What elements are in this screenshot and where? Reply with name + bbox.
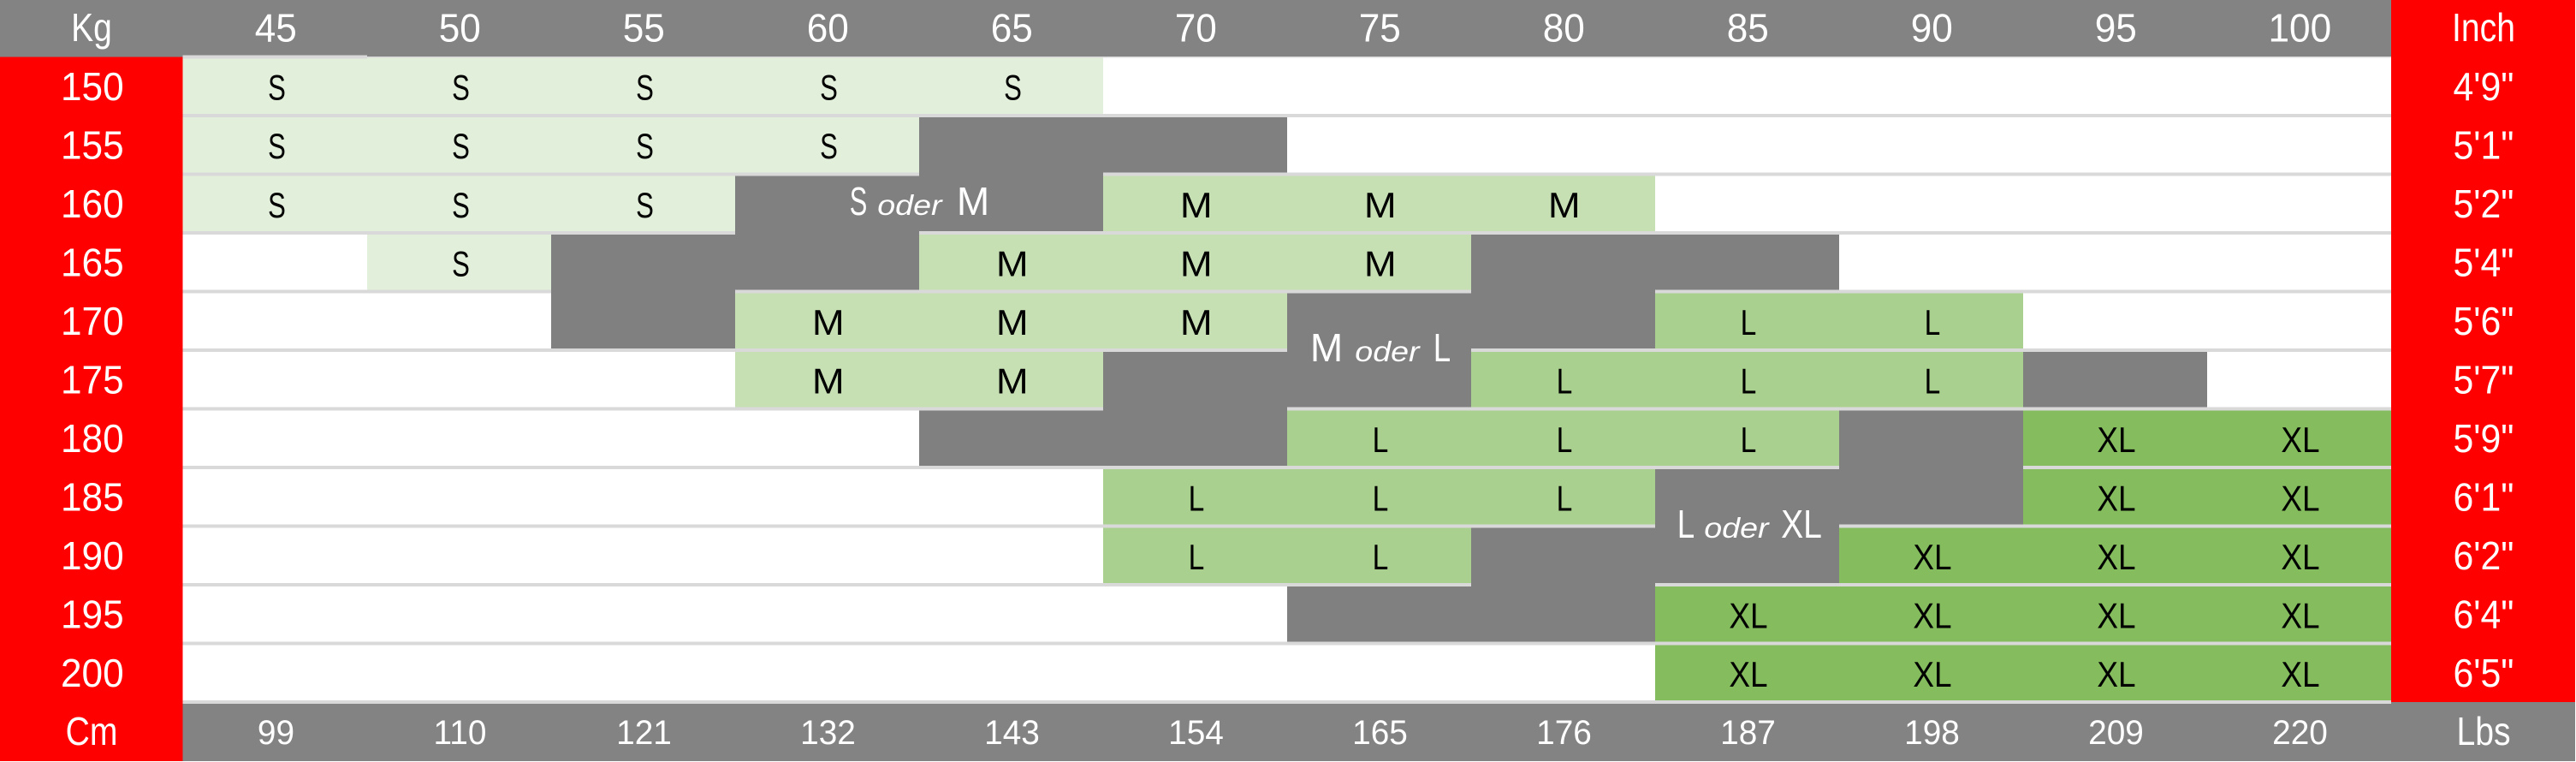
size L cells: L: [1741, 304, 1756, 343]
footer row: weight in lbs: 176: [1536, 713, 1592, 752]
size S cells: S: [636, 126, 654, 166]
height column in inches: [2391, 57, 2575, 702]
size L cells: L: [1925, 362, 1940, 402]
height column in inches: 6'5": [2454, 652, 2514, 695]
size S cells: S: [452, 126, 470, 166]
size XL cells: XL: [2281, 420, 2320, 461]
size XL cells: XL: [2281, 538, 2320, 578]
size XL cells: XL: [2097, 479, 2136, 519]
header row: weight in kg: Kg: [71, 6, 112, 51]
size XL cells: XL: [1913, 596, 1952, 636]
label: L oder XL: [1677, 502, 1822, 547]
size M cells: M: [996, 303, 1029, 343]
size S cells: S: [452, 244, 470, 284]
size M cells: M: [1364, 186, 1397, 226]
footer row: weight in lbs: 154: [1168, 713, 1224, 752]
footer row: weight in lbs: [183, 702, 2575, 761]
footer row: weight in lbs: 165: [1352, 713, 1408, 752]
size S cells: S: [268, 126, 286, 166]
size XL cells: XL: [2097, 596, 2136, 636]
size M cells: [735, 175, 1655, 409]
size L cells: L: [1189, 479, 1204, 519]
label: M oder L: oder: [1355, 336, 1421, 367]
label: S oder M: oder: [877, 190, 943, 221]
height column in cm: 195: [61, 592, 124, 637]
header row: weight in kg: 95: [2095, 6, 2137, 51]
label: M oder L: M: [1310, 325, 1343, 370]
label: M oder L: [1310, 325, 1451, 370]
size L cells: L: [1189, 539, 1204, 578]
height column in cm: [0, 57, 183, 761]
size L cells: L: [1373, 421, 1388, 461]
size M cells: M: [812, 303, 845, 343]
footer row: weight in lbs: 121: [616, 713, 672, 752]
footer row: weight in lbs: Lbs: [2456, 710, 2511, 754]
footer row: weight in lbs: 209: [2088, 713, 2144, 752]
header row: weight in kg: 65: [991, 6, 1033, 51]
height column in cm: 200: [61, 651, 124, 695]
label: S oder M: M: [957, 179, 989, 223]
height column in inches: 6'2": [2454, 535, 2514, 578]
size XL cells: XL: [2281, 596, 2320, 636]
size S cells: S: [452, 185, 470, 225]
size XL cells: XL: [1913, 655, 1952, 695]
height column in inches: 5'2": [2454, 183, 2514, 226]
header row: weight in kg: 100: [2268, 6, 2331, 51]
size M cells: M: [996, 244, 1029, 284]
size XL cells: XL: [1729, 655, 1768, 695]
size XL cells: XL: [2097, 538, 2136, 578]
height column in cm: 190: [61, 533, 124, 578]
size XL cells: XL: [2097, 655, 2136, 695]
size L cells: L: [1925, 304, 1940, 343]
size L cells: L: [1557, 362, 1572, 402]
height column in cm: 150: [61, 64, 124, 109]
height column in inches: 5'1": [2454, 124, 2514, 168]
size L cells: L: [1373, 539, 1388, 578]
height column in inches: 6'1": [2454, 476, 2514, 520]
size S cells: S: [268, 68, 286, 108]
size S cells: S: [820, 126, 838, 166]
size XL cells: XL: [1729, 596, 1768, 636]
header row: weight in kg: 50: [439, 6, 481, 51]
size XL cells: XL: [2281, 655, 2320, 695]
size S cells: S: [1004, 68, 1022, 108]
size L cells: L: [1557, 421, 1572, 461]
label: S oder M: [850, 179, 989, 224]
header row: weight in kg: 85: [1727, 6, 1769, 51]
grey in-between zones: [551, 116, 2207, 644]
footer row: weight in lbs: 143: [984, 713, 1040, 752]
label: L oder XL: L: [1677, 502, 1695, 546]
size M cells: M: [1180, 244, 1213, 284]
size S cells: S: [452, 68, 470, 108]
height column in cm: 185: [61, 475, 124, 520]
header row: weight in kg: 70: [1175, 6, 1217, 51]
size M cells: M: [1548, 186, 1581, 226]
label: L oder XL: XL: [1781, 503, 1822, 547]
header row: weight in kg: 80: [1543, 6, 1585, 51]
height column in inches: 5'7": [2454, 359, 2514, 402]
header row: weight in kg: 60: [807, 6, 849, 51]
size L cells: [1103, 291, 2023, 585]
height column in cm: 180: [61, 416, 124, 461]
header row: weight in kg: 90: [1911, 6, 1953, 51]
header row: weight in kg: 75: [1359, 6, 1401, 51]
height column in inches: 5'4": [2454, 241, 2514, 285]
height column in cm: 175: [61, 358, 124, 402]
footer row: weight in lbs: 132: [800, 713, 856, 752]
height column in cm: 155: [61, 123, 124, 168]
header row: weight in kg: 45: [255, 6, 297, 51]
header row: weight in kg: [0, 0, 2391, 57]
size L cells: L: [1741, 421, 1756, 461]
size M cells: M: [1180, 186, 1213, 226]
size M cells: M: [812, 361, 845, 402]
size S cells: S: [268, 185, 286, 225]
size S cells: S: [820, 68, 838, 108]
footer row: weight in lbs: 110: [434, 713, 486, 752]
footer row: weight in lbs: 198: [1904, 713, 1960, 752]
footer row: weight in lbs: 99: [258, 713, 294, 752]
label: L oder XL: oder: [1704, 513, 1770, 544]
label: M oder L: L: [1433, 325, 1451, 370]
height column in cm: 165: [61, 241, 124, 285]
size S cells: S: [636, 68, 654, 108]
height column in cm: 160: [61, 182, 124, 226]
size M cells: M: [996, 361, 1029, 402]
size XL cells: XL: [2097, 420, 2136, 461]
size M cells: M: [1364, 244, 1397, 284]
size XL cells: [1655, 409, 2391, 702]
size XL cells: XL: [1913, 538, 1952, 578]
height column in inches: 5'6": [2454, 301, 2514, 343]
size S cells: S: [636, 185, 654, 225]
size L cells: L: [1373, 479, 1388, 519]
inch header: [2391, 0, 2575, 57]
header row: weight in kg: 55: [623, 6, 665, 51]
height column in cm: 170: [61, 299, 124, 343]
size XL cells: XL: [2281, 479, 2320, 519]
size L cells: L: [1741, 362, 1756, 402]
size M cells: M: [1180, 303, 1213, 343]
size S cells: [183, 57, 1103, 291]
footer row: weight in lbs: 220: [2272, 713, 2328, 752]
height column in inches: 4'9": [2454, 66, 2514, 109]
inch header: Inch: [2452, 6, 2515, 51]
label: S oder M: S: [850, 181, 867, 224]
height column in cm: Cm: [66, 710, 117, 754]
height column in inches: 6'4": [2454, 593, 2514, 637]
height column in inches: 5'9": [2454, 418, 2514, 461]
size L cells: L: [1557, 479, 1572, 519]
footer row: weight in lbs: 187: [1720, 713, 1776, 752]
